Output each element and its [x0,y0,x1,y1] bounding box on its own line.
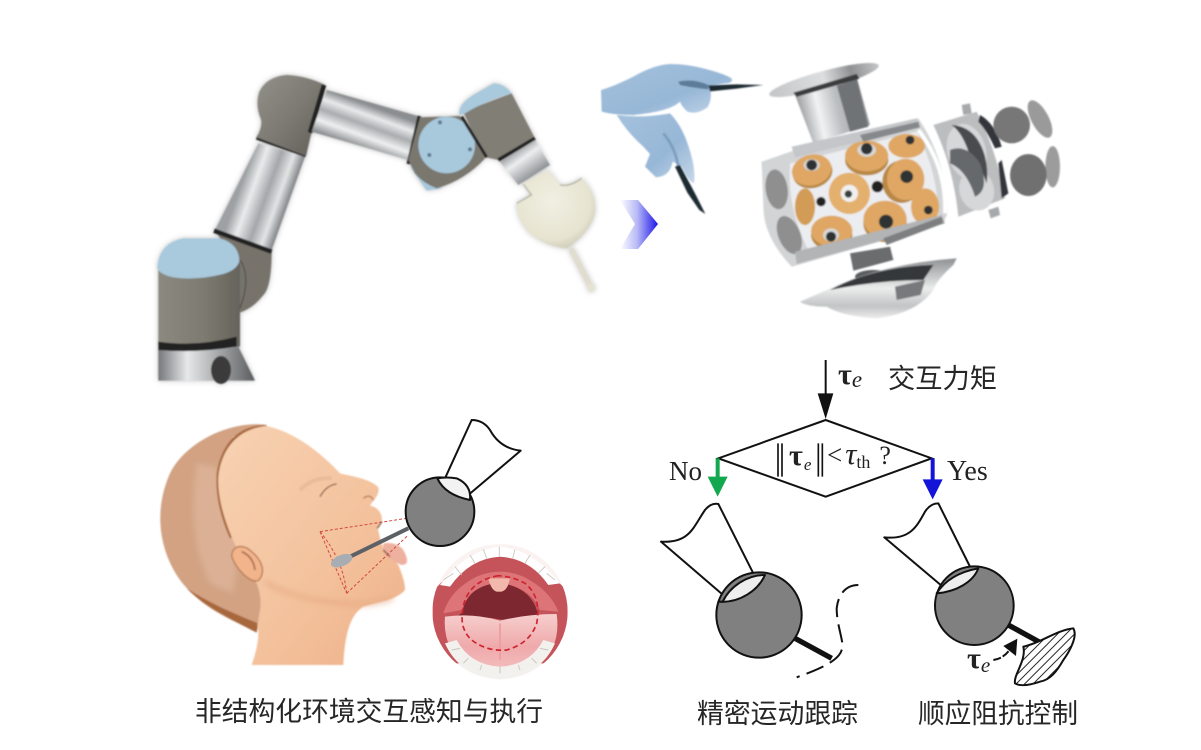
caption: left: 非结构化环境交互感知与执行 [195,697,543,727]
icon: gloved hands with scalpels [601,64,763,214]
condition: threshold: th [856,452,870,472]
sensor internals [762,57,1060,318]
sensor exploded view [762,57,1060,318]
left gripper tracking [661,504,858,677]
label: interaction torque: τ [838,358,852,391]
gripper ball with handle [406,420,521,546]
right gripper compliant contact [884,503,1075,685]
condition: threshold: ? [879,441,891,470]
label: Yes: Yes [947,456,988,487]
input arrow [818,360,833,419]
condition: threshold: <τ [827,436,856,471]
face profile with swab [160,420,568,679]
dashed inspection frustum [320,518,408,593]
caption: interaction torque: 交互力矩 [888,364,997,394]
label: contact torque: τ [967,642,981,675]
mouth interior inset [432,544,568,679]
green arrow: No [708,458,728,497]
caption: compliant impedance control: 顺应阻抗控制 [918,699,1078,729]
swab [329,528,408,570]
label: No: No [669,456,702,486]
robot arm body [157,75,595,384]
label: interaction torque: e [852,367,862,392]
head illustration [160,424,407,665]
arrow: chevron to sensor [620,200,658,249]
condition: torque norm: τ [789,439,803,472]
norm bars [778,443,822,477]
condition: torque norm: e [804,455,812,474]
decision flow diagram [661,360,1075,685]
decision diamond [718,420,932,497]
red dashed target area [462,576,538,650]
robot arm with spherical gripper [157,75,595,384]
caption: precision tracking: 精密运动跟踪 [697,699,858,729]
blue arrow: Yes [923,458,943,499]
label: contact torque: e [981,653,990,677]
